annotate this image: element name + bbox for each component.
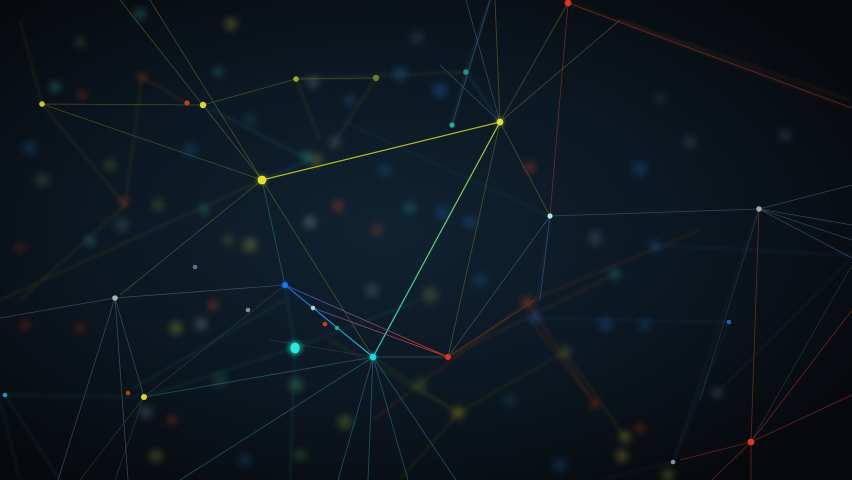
glow halos bbox=[257, 118, 504, 361]
yellow hub links bbox=[42, 0, 620, 357]
link: blue to red bbox=[285, 285, 448, 357]
dim links bbox=[80, 209, 852, 480]
link: bright yellow bbox=[262, 122, 500, 180]
link: yellow to cyan bbox=[373, 122, 500, 357]
link: blue to cyan bbox=[285, 285, 373, 357]
red node links bbox=[448, 3, 852, 480]
cyan hub links bbox=[144, 180, 456, 480]
